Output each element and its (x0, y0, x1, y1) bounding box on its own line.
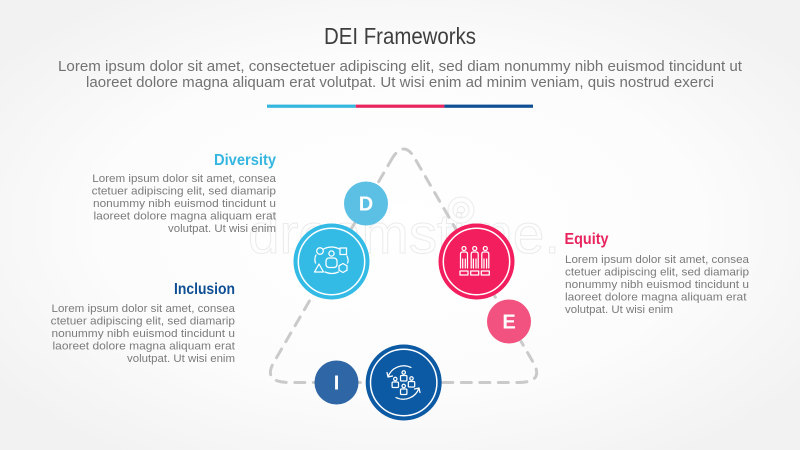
body: diversity: volutpat. Ut wisi enim (168, 223, 276, 235)
body: inclusion: ctetuer adipiscing elit, sed diamarip (51, 316, 235, 328)
subtitle text: laoreet dolore magna aliquam erat volutpat. Ut wisi enim ad minim veniam, quis nostrud exerci (86, 75, 714, 91)
heading: equity: Equity (564, 231, 609, 248)
panel: inclusion text (51, 281, 235, 365)
letter badge: E: E (502, 312, 516, 334)
dashed triangle (270, 149, 537, 382)
letter badge: E (487, 300, 531, 344)
body: diversity: ctetuer adipiscing elit, sed diamarip (92, 186, 276, 198)
letter badge: D: D (359, 194, 373, 216)
body: inclusion: volutpat. Ut wisi enim (127, 353, 235, 365)
panel: diversity text (92, 152, 276, 235)
body: equity: laoreet dolore magna aliquam erat (565, 292, 746, 304)
body: inclusion: laoreet dolore magna aliquam erat (52, 340, 235, 352)
body: equity (565, 254, 749, 316)
node: diversity circle with icon (294, 224, 370, 300)
node: equity circle with icon (438, 224, 514, 300)
body: equity: ctetuer adipiscing elit, sed diamarip (565, 266, 749, 278)
letter badge: I: I (334, 372, 339, 394)
body: equity: nonummy nibh euismod tincidunt u (565, 279, 749, 291)
heading: diversity: Diversity (214, 152, 276, 169)
title: DEI Frameworks (324, 23, 476, 49)
body: diversity: nonummy nibh euismod tincidunt u (93, 198, 276, 210)
subtitle text: Lorem ipsum dolor sit amet, consectetuer adipiscing elit, sed diam nonummy nibh euismod tincidunt ut (58, 59, 742, 75)
icon: diverse people shapes (314, 247, 348, 274)
body: equity: Lorem ipsum dolor sit amet, consea (565, 254, 749, 266)
heading: inclusion: Inclusion (174, 281, 235, 298)
body: inclusion: Lorem ipsum dolor sit amet, consea (52, 303, 235, 315)
body: diversity (92, 173, 276, 235)
icon: three equal people (460, 246, 489, 275)
body: diversity: laoreet dolore magna aliquam erat (94, 210, 276, 222)
subtitle text (58, 59, 742, 91)
panel: equity text (564, 231, 749, 316)
body: inclusion: nonummy nibh euismod tincidunt u (52, 328, 235, 340)
tricolor divider (267, 105, 533, 108)
body: diversity: Lorem ipsum dolor sit amet, consea (92, 173, 276, 185)
letter badge: D (344, 182, 388, 226)
icon: group with cycle arrows (387, 366, 420, 399)
node: inclusion circle with icon (366, 344, 442, 420)
body: inclusion (51, 303, 235, 365)
body: equity: volutpat. Ut wisi enim (565, 304, 673, 316)
watermark: dreamstime. (248, 202, 560, 265)
letter badge: I (314, 360, 358, 404)
